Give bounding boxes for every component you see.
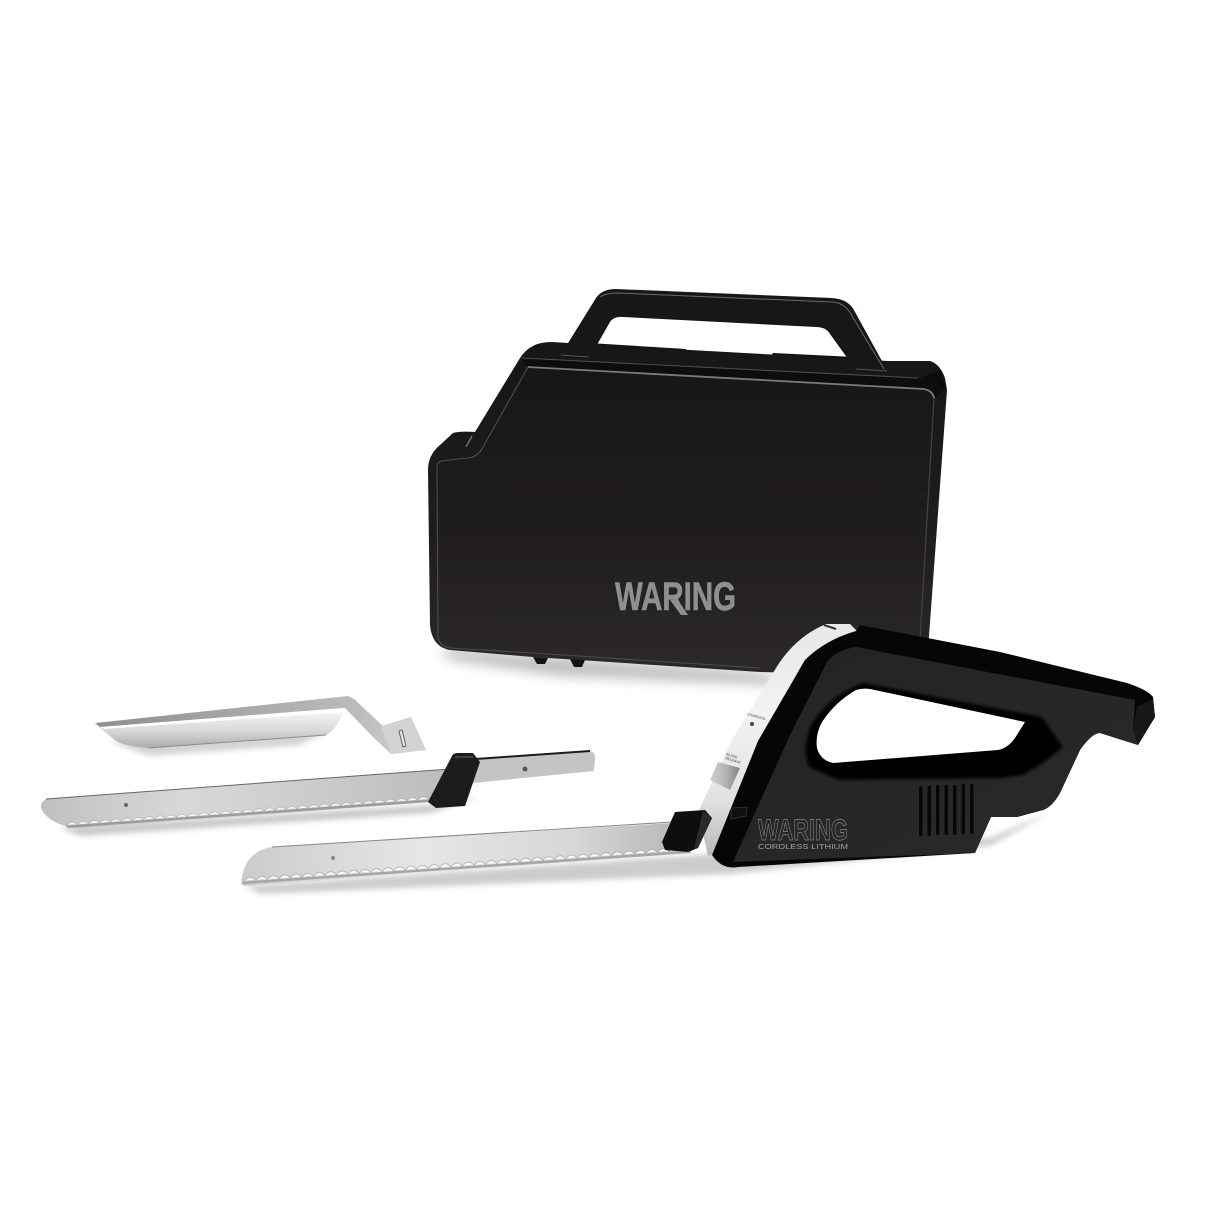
long blade body xyxy=(241,823,690,886)
knife blade clip xyxy=(662,810,712,852)
knife side latch xyxy=(731,807,747,819)
case seam line xyxy=(521,358,918,378)
case lid band xyxy=(520,358,946,398)
blade guide accessory xyxy=(95,696,426,754)
knife product name: CORDLESS LITHIUM xyxy=(758,842,848,851)
case panel top highlight xyxy=(528,367,934,398)
knife WARING outline logo xyxy=(758,814,848,851)
knife control label: BLADE xyxy=(726,752,738,760)
spare blade xyxy=(41,751,595,830)
guide plate xyxy=(381,717,426,754)
spare blade front xyxy=(41,769,450,829)
case inner panel line xyxy=(437,367,760,668)
long blade on knife xyxy=(241,822,691,886)
storage case xyxy=(428,289,947,677)
guide top rim xyxy=(95,696,426,754)
knife silhouette gloss xyxy=(712,625,1155,868)
knife handle end facet xyxy=(1133,699,1155,745)
knife handle opening xyxy=(817,689,1025,763)
case notch highlight xyxy=(466,436,472,447)
long blade serration xyxy=(242,844,691,886)
electric knife xyxy=(662,624,1155,868)
shadows under products xyxy=(60,648,1050,894)
knife silver strip xyxy=(698,624,858,856)
knife control label: CHARGING xyxy=(747,712,766,721)
knife WARING outline logo: WARING xyxy=(758,814,848,847)
spare blade rear xyxy=(473,751,595,783)
case handle xyxy=(560,289,888,372)
knife control label: RELEASE xyxy=(725,756,742,765)
case hinge tabs xyxy=(589,343,858,376)
knife control label xyxy=(725,712,766,765)
spare blade serration xyxy=(66,794,431,830)
knife slider button xyxy=(710,762,740,790)
guide bowl xyxy=(99,712,343,748)
case latches xyxy=(533,657,585,667)
case body xyxy=(428,342,947,677)
case WARING logo: WARING xyxy=(615,575,736,619)
knife handle inner shadow xyxy=(806,683,1063,780)
knife matte panel xyxy=(733,647,1138,862)
spare blade clip xyxy=(428,753,480,808)
knife vent slots xyxy=(919,784,974,836)
